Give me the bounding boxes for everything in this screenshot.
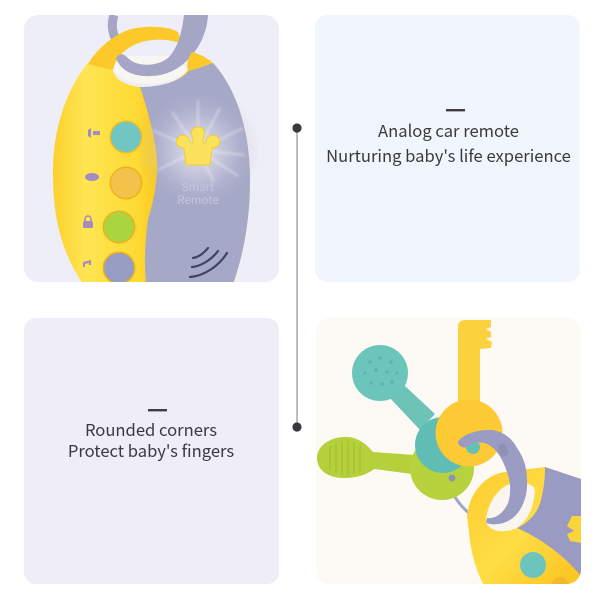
panel: teething keys photo: [316, 318, 581, 595]
text block: Rounded corners: [85, 417, 217, 441]
icon: speaker waves: [190, 248, 227, 277]
button: orange: [110, 166, 142, 200]
remote label: [178, 182, 218, 204]
icon: gray ring front: [116, 15, 208, 76]
hole in handle: [113, 56, 188, 84]
icon: teal key: [352, 345, 471, 473]
text block: [326, 118, 571, 167]
icon: handle right stub: [187, 52, 213, 71]
light burst: [140, 100, 246, 192]
text block: Analog car remote: [378, 118, 519, 142]
icon: green key: [317, 436, 474, 500]
panel: remote photo: [24, 15, 279, 284]
remote label: Remote: [177, 192, 219, 208]
icon: crown: [176, 127, 220, 165]
icon: yellow handle: [88, 27, 182, 70]
remote body: [53, 56, 260, 284]
dash: [148, 409, 167, 411]
text block: Nurturing baby's life experience: [326, 143, 571, 167]
icon: remote corner: [467, 467, 581, 595]
panel: analog car remote: [315, 15, 580, 282]
button: teal: [110, 120, 142, 154]
timeline connector: [292, 123, 302, 432]
dash: [446, 109, 465, 111]
text block: Protect baby's fingers: [68, 438, 234, 462]
icon: gray clip: [458, 430, 527, 524]
panel: rounded corners: [24, 318, 279, 584]
icon: gray ring back: [112, 15, 116, 40]
icon: yellow key: [436, 320, 502, 466]
icon: button glyphs: [83, 128, 100, 267]
remote label: Smart: [182, 179, 215, 195]
icon: thin gray loop: [454, 496, 468, 514]
button: gray: [102, 252, 136, 284]
button: green: [102, 210, 136, 244]
text block: [68, 417, 234, 462]
